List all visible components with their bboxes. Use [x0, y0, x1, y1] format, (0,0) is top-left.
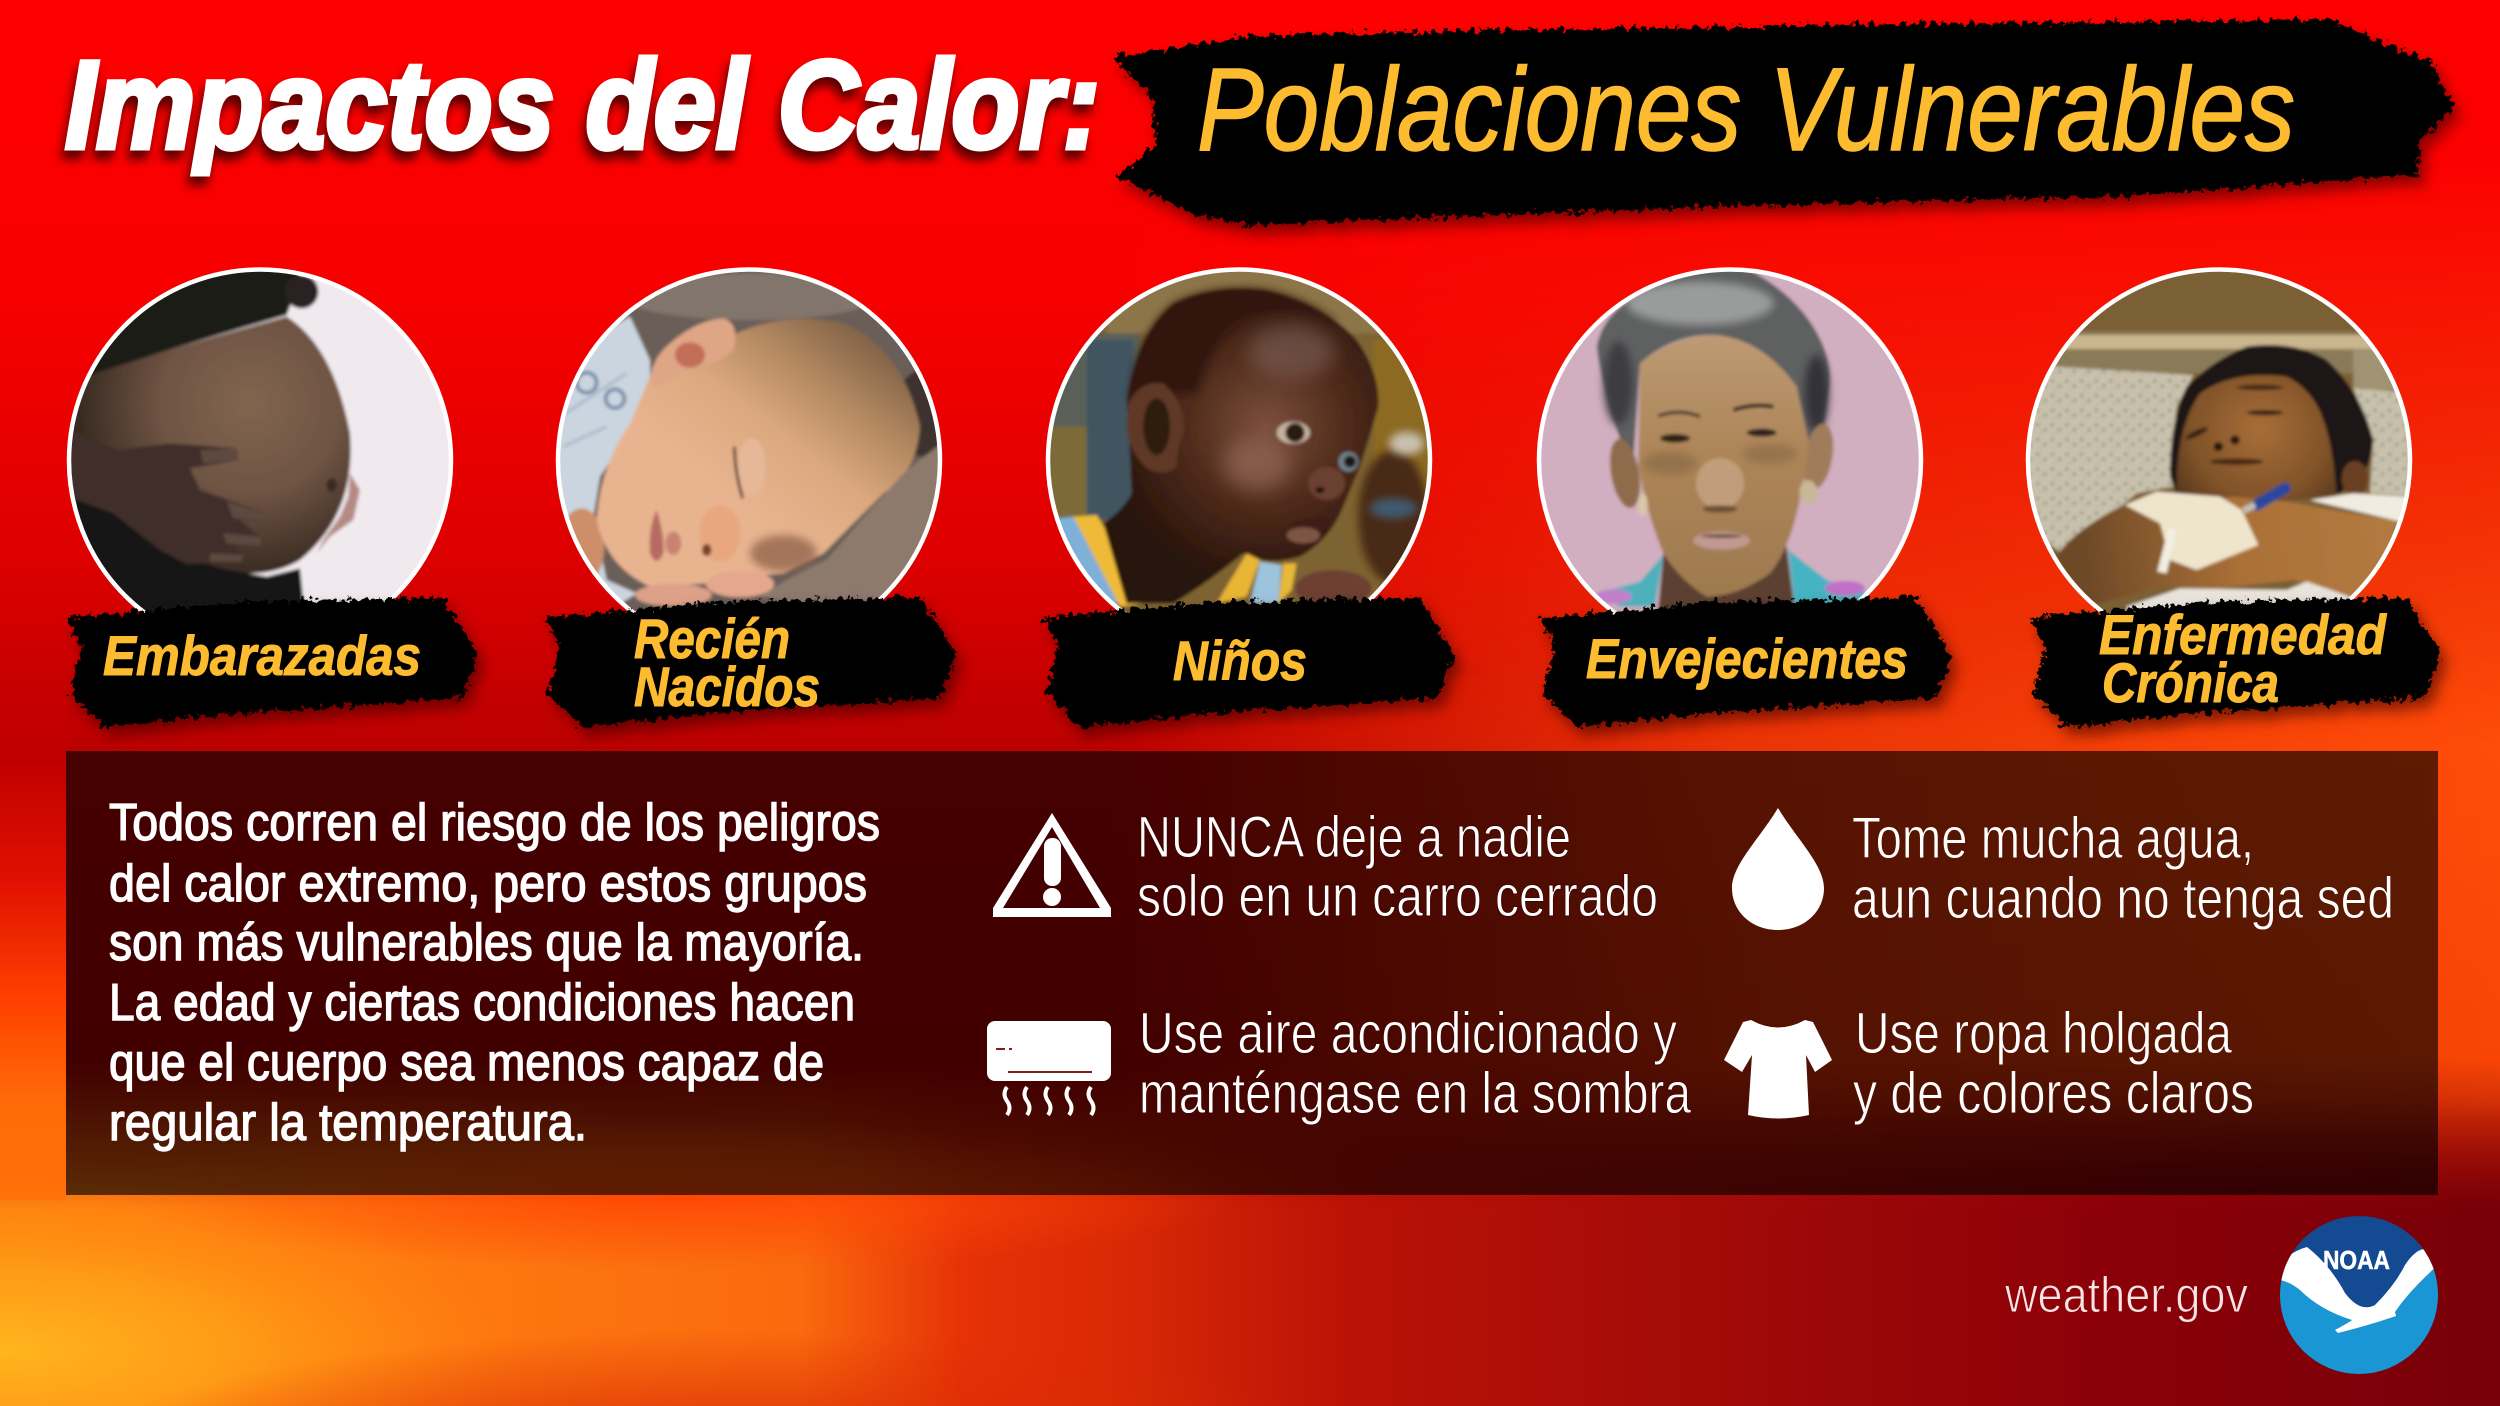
icon: shirt [1724, 1020, 1832, 1118]
group: enfermedad cronica [2020, 260, 2441, 727]
tip: loose clothing [1853, 1001, 2254, 1126]
photo: pregnant belly [71, 272, 449, 613]
label text line 2: Crónica [2102, 651, 2279, 714]
intro paragraph: son más vulnerables que la mayoría. [109, 914, 864, 972]
label text line 2: Nacidos [634, 655, 820, 718]
tip: drink water: Tome mucha agua, [1852, 806, 2254, 871]
photo ring [1048, 270, 1430, 652]
label banner [1539, 597, 1951, 727]
intro paragraph: regular la temperatura. [109, 1094, 587, 1152]
group: envejecientes [1530, 260, 1951, 727]
intro paragraph: La edad y ciertas condiciones hacen [109, 974, 855, 1032]
label text: Niños [1173, 629, 1307, 692]
intro paragraph: que el cuerpo sea menos capaz de [109, 1034, 824, 1092]
title: Impactos del Calor: Impactos del Calor: [65, 36, 1100, 175]
panel: safety information [66, 751, 2438, 1195]
tip: drink water: aun cuando no tenga sed [1852, 866, 2394, 931]
tip: air conditioning: Use aire acondicionado y [1139, 1001, 1677, 1066]
tip: never leave alone [1137, 805, 1658, 929]
photo: young child [1050, 272, 1428, 613]
intro paragraph: Todos corren el riesgo de los peligros [109, 794, 880, 852]
logo: NOAA [2280, 1216, 2438, 1374]
tip: never leave alone: solo en un carro cerrado [1137, 864, 1658, 929]
icon: air conditioner [987, 1021, 1111, 1115]
photo: elderly woman [1541, 272, 1919, 616]
label banner [1042, 597, 1454, 727]
tip: drink water [1852, 806, 2394, 931]
subtitle text: Poblaciones Vulnerables [1197, 44, 2295, 176]
photo: sleeping newborn [560, 272, 938, 613]
photo ring [558, 270, 940, 652]
tip: air conditioning [1139, 1001, 1692, 1126]
tip: loose clothing: Use ropa holgada [1855, 1001, 2233, 1066]
intro paragraph: del calor extremo, pero estos grupos [109, 855, 867, 913]
icon: water drop [1732, 808, 1824, 930]
label banner [66, 597, 478, 727]
tip: air conditioning: manténgase en la sombra [1139, 1061, 1692, 1126]
label banner [544, 597, 956, 727]
photo ring [69, 270, 451, 652]
group: recien nacidos [544, 260, 956, 727]
tip: loose clothing: y de colores claros [1853, 1061, 2254, 1126]
label text: Recién [634, 607, 790, 670]
photo: hospital patient [2030, 272, 2408, 614]
title banner: Poblaciones Vulnerables [1112, 20, 2454, 225]
photo ring [2028, 270, 2410, 652]
tip: never leave alone: NUNCA deje a nadie [1137, 805, 1571, 870]
website: weather.gov: weather.gov [2004, 1267, 2248, 1323]
photo ring [1539, 270, 1921, 652]
logo wordmark: NOAA [2323, 1245, 2390, 1275]
group: ninos [1040, 260, 1454, 727]
intro paragraph [109, 794, 880, 1152]
group: embarazadas [60, 260, 478, 727]
label text: Envejecientes [1586, 627, 1908, 690]
label banner [2029, 597, 2441, 727]
label text: Embarazadas [103, 624, 421, 687]
icon: warning triangle [993, 813, 1111, 917]
label text: Enfermedad [2099, 603, 2388, 666]
